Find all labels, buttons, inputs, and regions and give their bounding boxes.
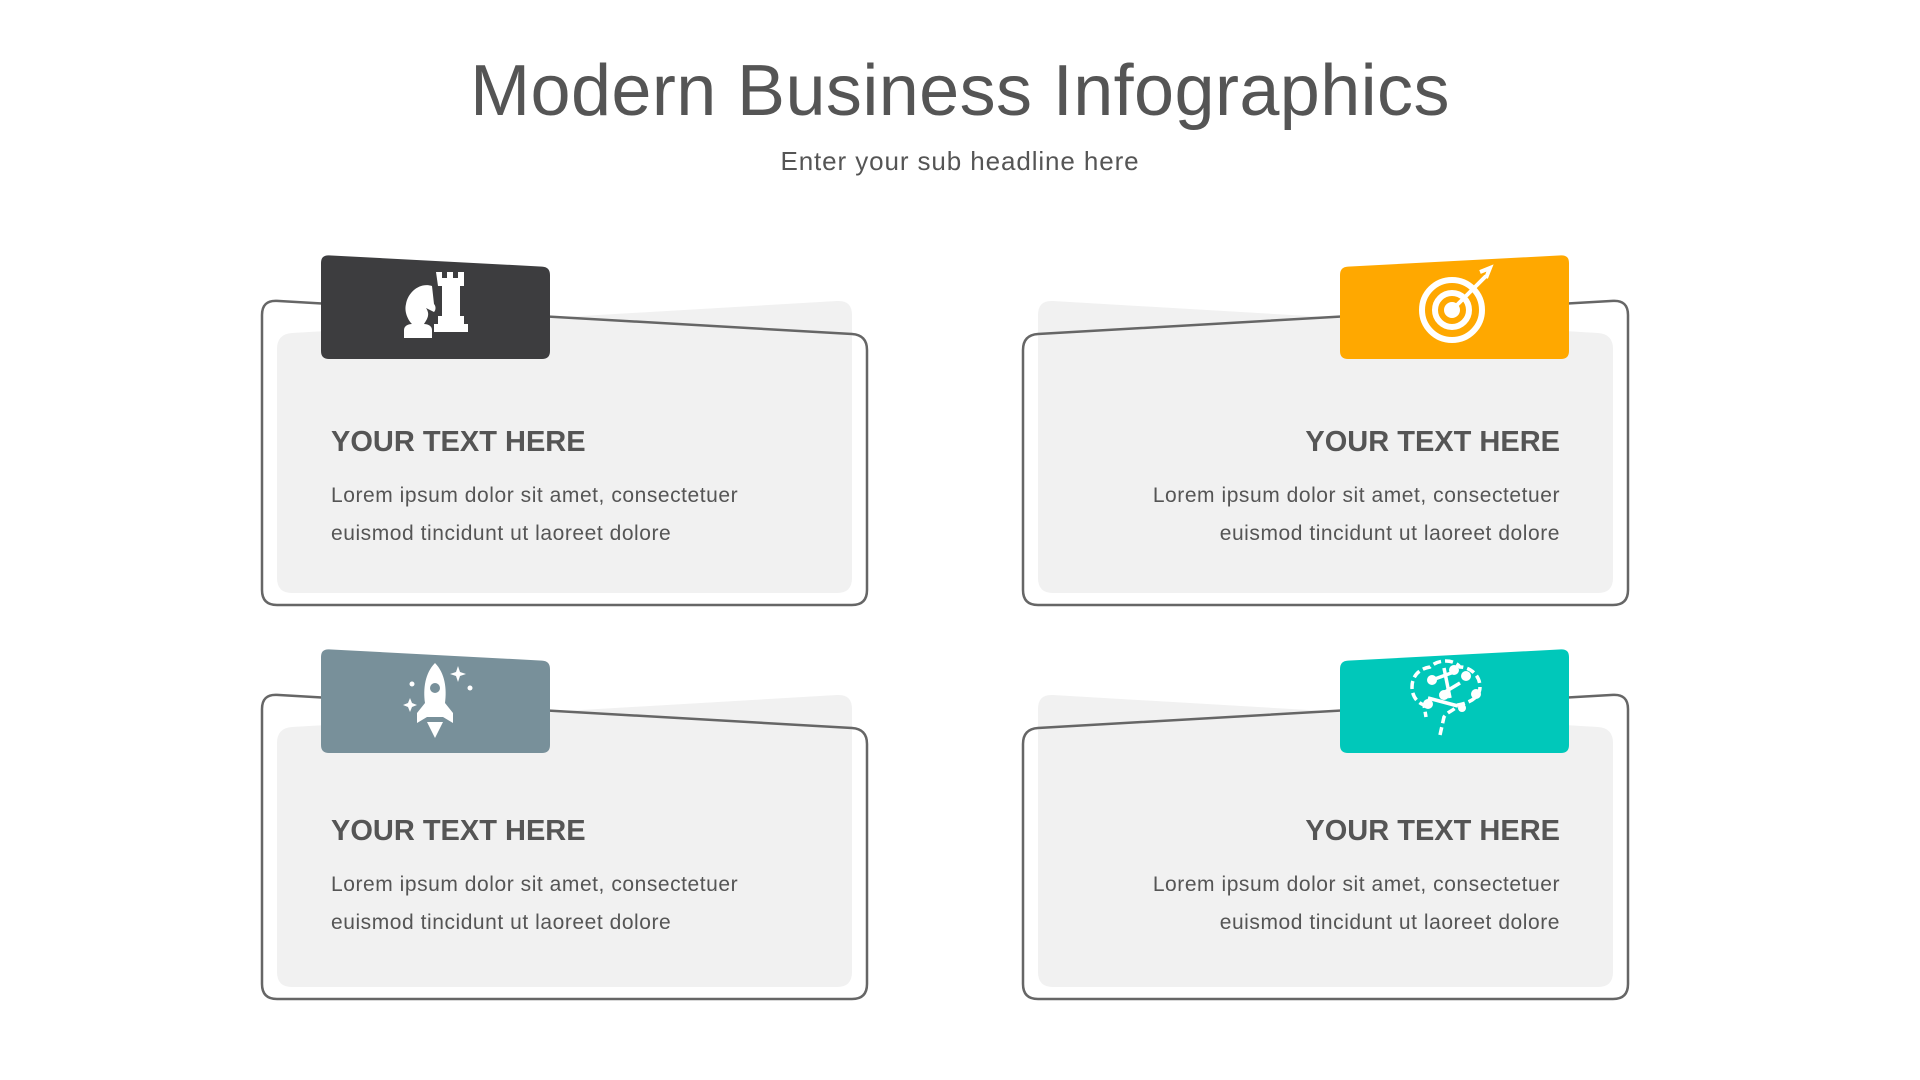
icon: rocket xyxy=(403,663,472,738)
text block: card 3 xyxy=(331,815,738,934)
icon: target xyxy=(1422,268,1490,340)
text block: card 1: YOUR TEXT HERE xyxy=(331,426,586,458)
text block: card 2 xyxy=(1153,426,1560,545)
subtitle: Enter your sub headline here xyxy=(780,146,1140,176)
text block: card 1 xyxy=(331,426,738,545)
text block: card 3: YOUR TEXT HERE xyxy=(331,815,586,847)
text block: card 4: Lorem ipsum dolor sit amet, consectetuer xyxy=(1153,873,1560,896)
text block: card 4: YOUR TEXT HERE xyxy=(1305,815,1560,847)
text block: card 4 xyxy=(1153,815,1560,934)
text block: card 2: YOUR TEXT HERE xyxy=(1305,426,1560,458)
text block: card 4: euismod tincidunt ut laoreet dolore xyxy=(1220,911,1560,934)
panel: card 2 xyxy=(1023,255,1628,605)
panel: card 1 xyxy=(262,255,867,605)
panel: card 3 xyxy=(262,649,867,999)
icon: brain xyxy=(1412,661,1481,735)
text block: card 2: Lorem ipsum dolor sit amet, consectetuer xyxy=(1153,484,1560,507)
panel: card 4 xyxy=(1023,649,1628,999)
text block: card 1: euismod tincidunt ut laoreet dolore xyxy=(331,522,671,545)
title: Modern Business Infographics xyxy=(470,51,1450,131)
text block: card 2: euismod tincidunt ut laoreet dolore xyxy=(1220,522,1560,545)
text block: card 1: Lorem ipsum dolor sit amet, consectetuer xyxy=(331,484,738,507)
text block: card 3: Lorem ipsum dolor sit amet, consectetuer xyxy=(331,873,738,896)
text block: card 3: euismod tincidunt ut laoreet dolore xyxy=(331,911,671,934)
icon: chess xyxy=(404,272,468,338)
